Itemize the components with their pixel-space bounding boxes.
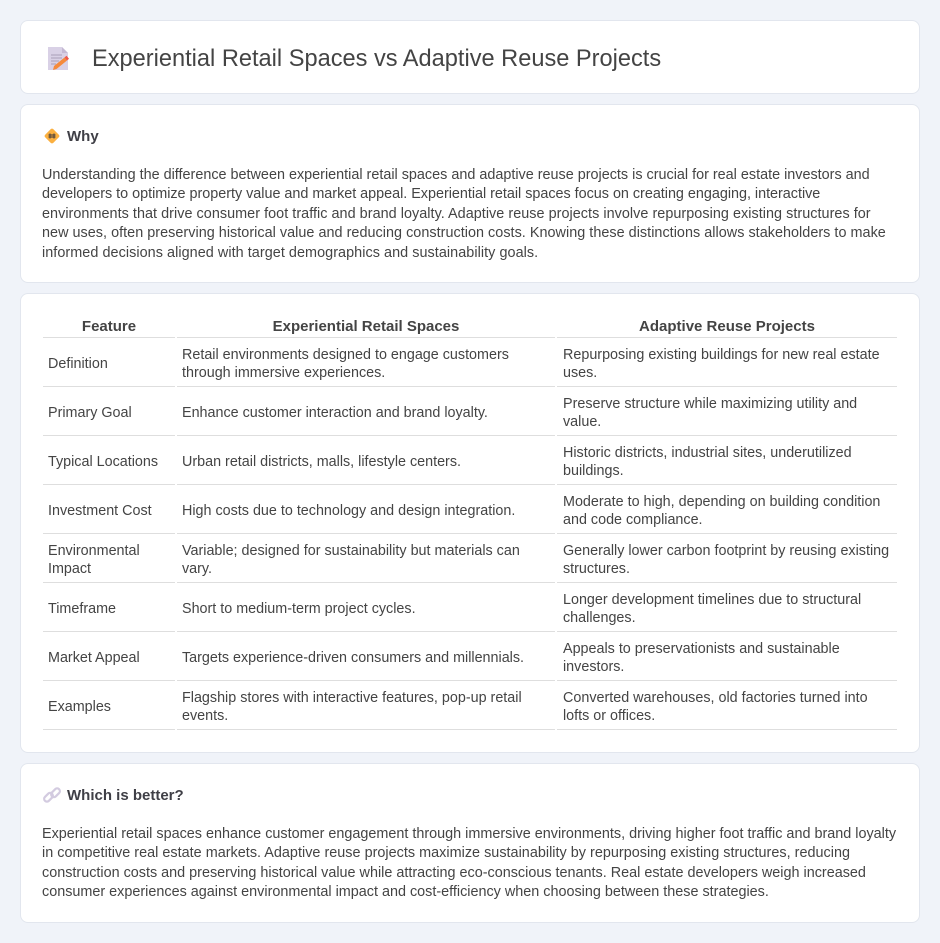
row: investment cost: [43, 494, 897, 534]
row: timeframe: challenges.: [563, 610, 636, 626]
panel: title card: [20, 20, 920, 94]
row: market appeal: Market Appeal: [48, 650, 140, 666]
row: environmental impact: Impact: [48, 561, 91, 577]
text block: why explanation: Understanding the difference between experiential retail spaces and adaptive reuse projects is crucial for real estate investors and: [42, 166, 870, 182]
row: market appeal: Appeals to preservationists and sustainable: [563, 641, 840, 657]
panel: why: [20, 104, 920, 283]
text block: why explanation: new uses, often preserving historical value and reducing construction costs. Knowing these distinctions allows stakeholders to make: [42, 225, 886, 241]
row: investment cost: High costs due to technology and design integration.: [182, 503, 515, 519]
row: environmental impact: Generally lower carbon footprint by reusing existing: [563, 543, 889, 559]
row: primary goal: value.: [563, 414, 601, 430]
icon: chain link: [43, 787, 61, 803]
icon: document with pencil: [48, 47, 69, 70]
row: typical locations: Urban retail districts, malls, lifestyle centers.: [182, 454, 461, 470]
row: examples: Flagship stores with interactive features, pop-up retail: [182, 690, 522, 706]
row: timeframe: [43, 592, 897, 632]
row: examples: Converted warehouses, old factories turned into: [563, 690, 868, 706]
text block: verdict: consumer experiences against environmental impact and cost-efficiency when choosing between these strategies.: [42, 884, 769, 900]
row: primary goal: [43, 396, 897, 436]
row: investment cost: Moderate to high, depending on building condition: [563, 494, 880, 510]
row: examples: events.: [182, 708, 228, 724]
text block: why explanation: environments that drive consumer foot traffic and brand loyalty. Adaptive reuse projects involve repurposing existing structures for: [42, 206, 871, 222]
table header: Experiential Retail Spaces: [273, 318, 459, 335]
row: typical locations: Historic districts, industrial sites, underutilized: [563, 445, 852, 461]
row: primary goal: Preserve structure while maximizing utility and: [563, 396, 857, 412]
text block: verdict: in competitive real estate markets. Adaptive reuse projects maximize sustainability by repurposing existing structures, reducing: [42, 845, 850, 861]
row: environmental impact: Variable; designed for sustainability but materials can: [182, 543, 520, 559]
text block: why explanation: informed decisions aligned with target demographics and sustainability goals.: [42, 244, 538, 260]
row: environmental impact: structures.: [563, 561, 630, 577]
row: market appeal: [43, 641, 897, 681]
row: examples: lofts or offices.: [563, 708, 655, 724]
row: investment cost: and code compliance.: [563, 512, 703, 528]
row: typical locations: Typical Locations: [48, 454, 158, 470]
row: primary goal: Primary Goal: [48, 405, 132, 421]
heading: which is better: Which is better?: [67, 787, 184, 804]
row: timeframe: Longer development timelines due to structural: [563, 592, 861, 608]
row: examples: Examples: [48, 699, 111, 715]
row: definition: Retail environments designed to engage customers: [182, 347, 509, 363]
table header: Adaptive Reuse Projects: [639, 318, 815, 335]
row: market appeal: investors.: [563, 659, 624, 675]
row: typical locations: [43, 445, 897, 485]
title: Experiential Retail Spaces vs Adaptive Reuse Projects: [92, 46, 661, 72]
panel: comparison table: [20, 293, 920, 753]
row: definition: through immersive experiences.: [182, 365, 385, 381]
row: primary goal: Enhance customer interaction and brand loyalty.: [182, 405, 488, 421]
row: environmental impact: [43, 543, 897, 583]
row: market appeal: Targets experience-driven consumers and millennials.: [182, 650, 524, 666]
text block: why explanation: [42, 166, 886, 260]
row: definition: [43, 347, 897, 387]
row: environmental impact: Environmental: [48, 543, 140, 559]
row: definition: uses.: [563, 365, 597, 381]
row: timeframe: Timeframe: [48, 601, 116, 617]
row: typical locations: buildings.: [563, 463, 624, 479]
row: definition: Repurposing existing buildings for new real estate: [563, 347, 880, 363]
row: investment cost: Investment Cost: [48, 503, 152, 519]
row: environmental impact: vary.: [182, 561, 212, 577]
row: timeframe: Short to medium-term project cycles.: [182, 601, 416, 617]
table header: Feature: [82, 318, 136, 335]
icon: warning diamond: [44, 128, 60, 144]
text block: verdict: construction costs and preserving historical value while attracting eco-conscious tenants. Real estate developers weigh increased: [42, 864, 866, 880]
text block: verdict: Experiential retail spaces enhance customer engagement through immersive environments, driving higher foot traffic and brand loyalty: [42, 826, 896, 842]
table header: [43, 318, 897, 338]
text block: why explanation: developers to optimize property value and market appeal. Experiential retail spaces focus on creating engaging, interactive: [42, 186, 820, 202]
row: examples: [43, 690, 897, 730]
heading: why: Why: [67, 128, 99, 145]
row: definition: Definition: [48, 356, 108, 372]
text block: verdict: [42, 826, 896, 900]
panel: which is better: [20, 763, 920, 923]
